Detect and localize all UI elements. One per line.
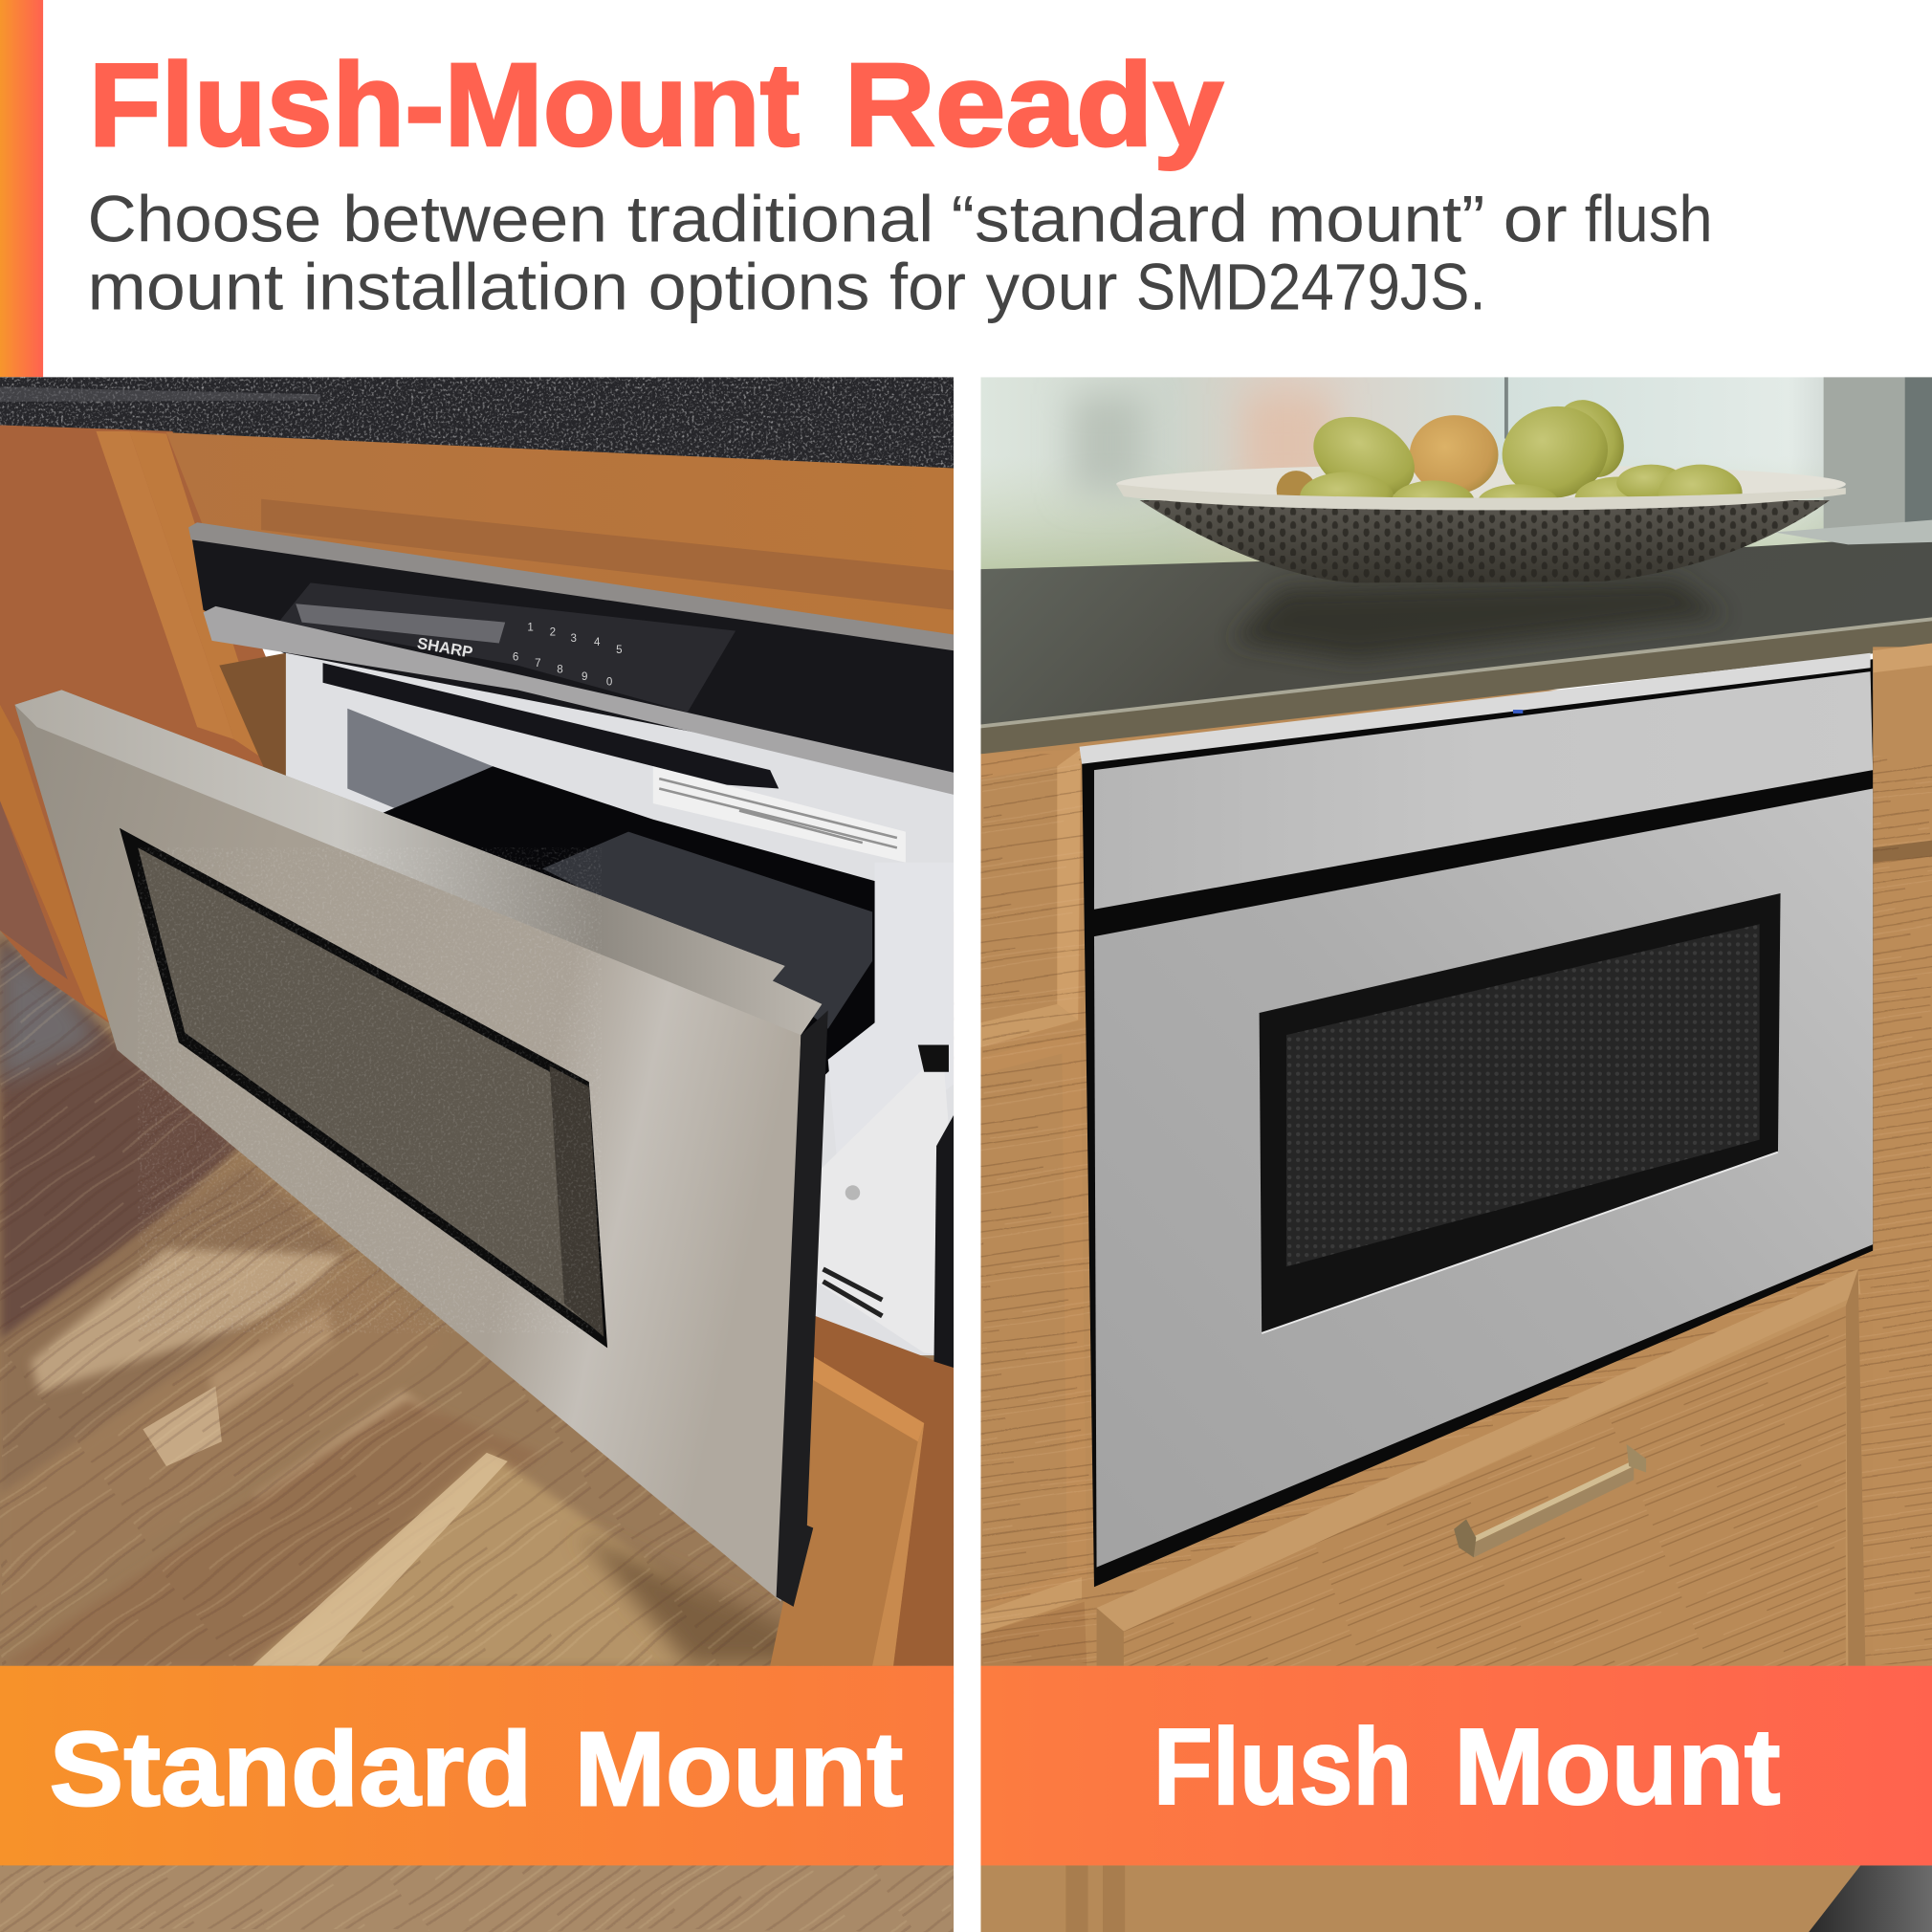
label: Flush — [1153, 1706, 1412, 1828]
blue indicator — [1513, 710, 1523, 714]
subtitle: SMD2479JS. — [1136, 251, 1486, 323]
window mesh — [1286, 924, 1760, 1266]
dark microwave opening — [191, 533, 954, 788]
subtitle: “standard — [952, 184, 1248, 256]
turntable tray — [542, 832, 872, 1029]
dark floor corner — [1809, 1865, 1932, 1932]
subtitle: traditional — [627, 184, 934, 256]
granite countertop — [0, 377, 954, 470]
keypad numbers: 3 — [570, 633, 577, 645]
stainless door — [14, 690, 828, 1607]
left upper cabinet door — [980, 749, 1081, 1047]
stone countertop — [980, 520, 1932, 754]
left lower cabinet door — [980, 1033, 1087, 1666]
cavity side mesh — [347, 709, 493, 813]
panel: standard mount photo — [0, 377, 954, 1932]
bowl body — [1140, 500, 1830, 582]
handle recess — [323, 663, 779, 788]
keypad numbers: 7 — [535, 658, 541, 670]
subtitle: your — [986, 251, 1117, 323]
microwave door — [1094, 788, 1873, 1568]
accent strip — [0, 0, 43, 377]
brand label: SHARP — [416, 634, 474, 662]
subtitle — [87, 184, 1713, 323]
keypad numbers: 1 — [527, 623, 534, 634]
keypad numbers — [513, 623, 623, 688]
bowl rim — [1116, 484, 1846, 510]
door window — [120, 828, 607, 1348]
top trim — [188, 522, 954, 650]
keypad numbers: 4 — [594, 637, 601, 648]
subtitle: Choose — [87, 184, 321, 256]
warning label — [653, 766, 906, 863]
white microwave body — [286, 653, 954, 1355]
keypad numbers: 9 — [582, 671, 588, 683]
subtitle: for — [889, 251, 966, 323]
window background — [980, 377, 1932, 586]
control panel — [278, 582, 735, 713]
right white side — [828, 863, 954, 1171]
label: Standard — [50, 1710, 533, 1828]
subtitle: mount — [87, 251, 283, 323]
subtitle: between — [342, 184, 607, 256]
banner: flush mount — [980, 1666, 1932, 1865]
title: Flush-Mount — [89, 39, 800, 171]
white mounting bracket — [816, 1044, 954, 1368]
subtitle: options — [648, 251, 870, 323]
keypad numbers: 6 — [513, 652, 518, 664]
subtitle: installation — [303, 251, 628, 323]
drawer handle — [1454, 1444, 1646, 1557]
cabinet left column — [0, 425, 286, 1022]
keypad numbers: 5 — [616, 645, 623, 656]
floor grain — [0, 911, 954, 1932]
keypad numbers: 2 — [550, 627, 556, 639]
cabinet wood grain — [980, 754, 1932, 1666]
wood cabinet base — [980, 690, 1932, 1932]
fruit — [1277, 387, 1743, 525]
keypad numbers: 8 — [557, 664, 563, 675]
floor — [0, 911, 954, 1932]
door edge — [777, 1010, 828, 1607]
banner: standard mount — [0, 1666, 954, 1865]
subtitle: or — [1504, 184, 1568, 256]
label: Mount — [574, 1710, 903, 1828]
label: Mount — [1454, 1706, 1781, 1828]
oven cavity — [383, 766, 875, 1075]
subtitle: flush — [1585, 184, 1713, 256]
lower drawer — [1097, 1269, 1865, 1666]
lower silver trim — [204, 606, 954, 795]
control panel — [1080, 653, 1873, 910]
fruit bowl — [1116, 387, 1846, 582]
panel: flush mount photo — [980, 377, 1932, 1932]
title: Ready — [844, 39, 1223, 171]
upper wood rail — [166, 432, 954, 653]
right cabinet column — [1873, 643, 1932, 1666]
window frame — [1260, 893, 1781, 1333]
lower cabinet — [770, 1306, 954, 1666]
below-band cabinet — [980, 1865, 1932, 1932]
keypad numbers: 0 — [606, 676, 612, 688]
bowl interior — [1116, 465, 1846, 504]
drawer grain — [1121, 1306, 1846, 1666]
microwave recess — [1082, 659, 1873, 1587]
subtitle: mount” — [1268, 184, 1484, 256]
